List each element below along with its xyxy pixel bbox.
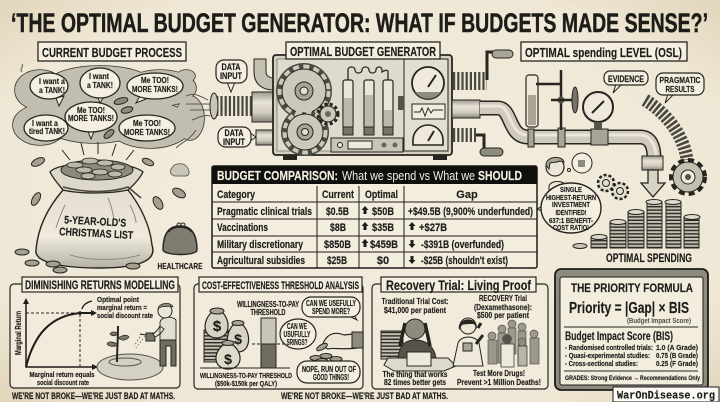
caption: the thing that works: The thing that works xyxy=(382,370,448,379)
speech bubble: I want a TANK 2 xyxy=(80,68,120,103)
callout: single highest-return investment xyxy=(537,183,601,233)
speech bubble: data input bottom: DATA xyxy=(224,128,244,138)
machine body xyxy=(273,55,452,160)
speech bubble: me too 2: Me TOO! xyxy=(77,106,105,115)
line chart: marginal return curve: Marginal Return xyxy=(13,311,23,355)
speech bubble: tired tank: tired TANK! xyxy=(29,127,65,136)
callout: single highest-return investment: IDENTIFIED! xyxy=(556,208,586,217)
threshold bar: THRESHOLD xyxy=(250,308,286,317)
recovery trial cost text: RECOVERY Trial xyxy=(479,294,527,303)
caption: test more drugs: Test More Drugs! xyxy=(473,369,525,378)
heading: optimal budget generator xyxy=(286,42,440,59)
small gears xyxy=(598,175,628,199)
test tube and stand xyxy=(526,70,577,130)
input pipes xyxy=(252,59,274,145)
speech bubble: can we usefully shrink: USUFULLY xyxy=(284,330,311,339)
main output pipe xyxy=(480,106,663,170)
callout: single highest-return investment: COST RATIO! xyxy=(553,223,589,232)
money bags xyxy=(204,308,249,369)
speech bubble: can we usefully shrink: SRINGS? xyxy=(286,338,308,347)
heading: diminishing returns: DIMINISHING RETURNS MODELLING xyxy=(25,280,175,292)
curved spring and gear xyxy=(645,100,705,194)
row: military discretionary: $850B xyxy=(324,239,351,251)
speech bubble: can we usefully spend more: SPEND MORE? xyxy=(312,307,350,316)
threshold bar: ($50k-$150k per QALY) xyxy=(215,379,277,388)
table frame xyxy=(212,166,537,268)
list: evidence grades xyxy=(565,343,698,368)
speech bubble: pragmatic results: PRAGMATIC xyxy=(660,75,700,85)
heading: budget impact score: Budget Impact Score (BIS) xyxy=(565,331,673,343)
table header: BUDGET COMPARISON: xyxy=(217,169,338,183)
heading: cost-effectiveness xyxy=(199,277,362,292)
money sack: 5-year-old's christmas list: CHRISTMAS LIST xyxy=(59,226,134,242)
speech bubble: data input top xyxy=(216,60,247,92)
column headers: Optimal xyxy=(365,189,398,201)
analyst figure and thought bubble xyxy=(546,153,592,192)
caption: test more drugs xyxy=(457,369,541,387)
formula caption: (Budget Impact Score) xyxy=(627,318,691,325)
speech bubble: data input bottom: INPUT xyxy=(223,137,245,147)
traditional trial cost text: $41,000 per patient xyxy=(384,306,446,315)
row: pragmatic clinical trials: $50B xyxy=(372,206,394,218)
panel frame xyxy=(194,284,363,389)
panel: cost-effectiveness threshold analysis xyxy=(194,277,363,389)
column headers xyxy=(217,189,478,201)
panel: diminishing returns modelling xyxy=(10,277,180,388)
panel: current budget process xyxy=(13,42,210,273)
speech bubble: data input bottom xyxy=(218,127,256,147)
recovery trial cost text xyxy=(474,294,532,320)
outer plaque xyxy=(555,269,708,390)
speech bubble: data input top: DATA xyxy=(222,62,241,72)
threshold bar: WILLINGNESS-TO-PAY xyxy=(237,300,299,309)
speech bubble: I want a TANK: a TANK! xyxy=(39,86,65,95)
caption: test more drugs: Prevent >1 Million Deaths! xyxy=(457,378,541,387)
speech bubble: evidence xyxy=(604,71,648,93)
money bags: $ xyxy=(224,351,232,367)
gauges and monitor xyxy=(412,67,445,145)
speech bubble: I want a TANK: I want a xyxy=(39,77,65,86)
control console xyxy=(331,138,403,152)
row: vaccinations: $8B xyxy=(330,222,346,234)
row: vaccinations: +$27B xyxy=(419,222,447,234)
money bags: $ xyxy=(234,331,242,347)
row: vaccinations xyxy=(217,222,447,234)
speech bubble: pragmatic results xyxy=(656,73,704,103)
row: agricultural subsidies: Agricultural subsidies xyxy=(217,255,305,267)
column headers: Current xyxy=(322,189,354,201)
heading: current budget process xyxy=(38,42,186,61)
list: evidence grades: 0.75 (B Grade) xyxy=(656,351,698,360)
output springs and crank xyxy=(452,50,513,156)
list: evidence grades: - Randomised controlled trials: xyxy=(565,343,653,352)
speech bubble: I want a TANK 2: I want xyxy=(89,72,109,81)
callout: single highest-return investment: INVESTMENT xyxy=(552,200,590,209)
speech bubble: nope: GOOD THINGS! xyxy=(313,373,349,382)
speech bubble: me too 3: MORE TANKS! xyxy=(124,128,170,137)
speech bubble: pragmatic results: RESULTS xyxy=(666,84,695,94)
panel: budget comparison table xyxy=(212,166,537,268)
speech bubble: me too 1: Me TOO! xyxy=(141,76,169,85)
row: pragmatic clinical trials: $0.5B xyxy=(326,206,349,218)
pressure gauge xyxy=(572,87,613,130)
row: military discretionary: $459B xyxy=(370,239,398,251)
scattered coins xyxy=(15,156,165,273)
healthcare coin purse xyxy=(158,164,203,271)
line chart: marginal return curve xyxy=(13,295,153,387)
table header: SHOULD xyxy=(478,169,522,183)
input spring xyxy=(210,93,252,119)
table header: What we spend vs What we xyxy=(342,169,475,183)
traditional trial cost text xyxy=(382,297,448,315)
speech bubble: me too 2 xyxy=(65,102,117,139)
panel: optimal budget generator xyxy=(210,42,513,160)
panel frame xyxy=(372,284,548,389)
illustration: crowd of patients xyxy=(488,320,539,367)
row: agricultural subsidies xyxy=(217,255,508,267)
recovery trial cost text: $500 per patient xyxy=(477,311,529,320)
down arrow xyxy=(641,170,665,197)
speech bubble: can we usefully shrink: CAN WE xyxy=(287,322,307,331)
coin stacks chart xyxy=(573,200,700,248)
illustration: stressed researcher xyxy=(381,319,456,371)
row: agricultural subsidies: $0 xyxy=(377,255,389,267)
caption: the thing that works: 82 times better gets xyxy=(384,378,446,387)
panel: recovery trial xyxy=(372,277,548,389)
speech bubble: can we usefully spend more: CAN WE USEFULLY xyxy=(306,299,356,308)
traditional trial cost text: Traditional Trial Cost: xyxy=(382,297,448,306)
panel: optimal spending level xyxy=(480,42,705,265)
speech bubble: tired tank: I want a xyxy=(32,119,58,128)
inner plaque xyxy=(560,277,703,385)
speech bubble: me too 3: Me TOO! xyxy=(133,119,161,128)
speech bubble: me too 1 xyxy=(127,73,183,103)
row: pragmatic clinical trials: Pragmatic clinical trials xyxy=(217,206,312,218)
heading: optimal budget generator: OPTIMAL BUDGET GENERATOR xyxy=(290,45,436,59)
illustration: gardener watering plant xyxy=(97,303,176,380)
line chart: marginal return curve: Marginal return equals xyxy=(30,370,94,379)
speech bubble: nope: NOPE, RUN OUT OF xyxy=(302,365,356,374)
speech bubble: I want a TANK 2: a TANK! xyxy=(87,81,113,90)
row: agricultural subsidies: -$25B (shouldn't exist) xyxy=(421,255,508,267)
row: vaccinations: Vaccinations xyxy=(217,222,268,234)
grey cloud of demands xyxy=(13,64,210,148)
speech bubble: nope xyxy=(297,361,360,383)
panel frame xyxy=(10,284,180,388)
money bags: $ xyxy=(213,318,222,335)
speech bubble: me too 1: MORE TANKS! xyxy=(132,85,178,94)
heading: priority formula: THE PRIORITY FORMULA xyxy=(571,281,693,295)
row: military discretionary: -$391B (overfunded) xyxy=(421,239,504,251)
list: evidence grades: 0.25 (F Grade) xyxy=(656,359,698,368)
callout: single highest-return investment: HIGHEST-RETURN xyxy=(546,193,596,202)
line chart: marginal return curve: social discount rate xyxy=(97,311,153,320)
speech bubble: me too 2: MORE TANKS! xyxy=(68,114,114,123)
list: evidence grades: 1.0 (A Grade) xyxy=(656,343,698,352)
column headers: Category xyxy=(217,189,256,201)
speech bubble: me too 3 xyxy=(119,115,175,141)
illustration: doctor xyxy=(453,318,483,366)
hand with coins xyxy=(310,332,363,364)
speech bubble: tired tank xyxy=(24,115,68,141)
list: evidence grades: - Quasi-experimental studies: xyxy=(565,351,650,360)
heading: diminishing returns xyxy=(22,277,178,292)
list: evidence grades: - Cross-sectional studies: xyxy=(565,359,638,368)
callout: single highest-return investment: SINGLE xyxy=(560,185,582,194)
line chart: marginal return curve: marginal return = xyxy=(97,303,147,312)
line chart: marginal return curve: Optimal point xyxy=(97,295,139,304)
row: vaccinations: $35B xyxy=(372,222,394,234)
speech bubble: I want a TANK xyxy=(30,73,68,106)
row: military discretionary: Military discretionary xyxy=(217,239,304,251)
heading: cost-effectiveness: COST-EFFECTIVENESS THRESHOLD ANALYSIS xyxy=(202,280,359,292)
row: military discretionary xyxy=(217,239,504,251)
speech bubble: can we usefully shrink xyxy=(280,319,316,349)
speech bubble: can we usefully spend more xyxy=(302,297,360,320)
row: pragmatic clinical trials xyxy=(217,206,533,218)
heading: current budget process: CURRENT BUDGET PROCESS xyxy=(42,45,182,60)
healthcare coin purse: HEALTHCARE xyxy=(158,261,203,271)
gears xyxy=(276,63,338,156)
money sack: 5-year-old's christmas list: 5-YEAR-OLD'S xyxy=(64,214,126,230)
recovery trial cost text: (Dexamethasone): xyxy=(474,303,532,312)
heading: OSL xyxy=(521,42,687,61)
threshold bar: WILLINGNESS-TO-PAY THRESHOLD xyxy=(200,371,292,380)
threshold bar xyxy=(200,300,299,388)
heading: recovery trial: Recovery Trial: Living Proof xyxy=(386,278,531,293)
table header xyxy=(212,166,537,184)
callout: single highest-return investment: 637:1 BENEFIT- xyxy=(549,216,593,225)
row: agricultural subsidies: $25B xyxy=(327,255,347,267)
footer note centre: WE'RE NOT BROKE—WE'RE JUST BAD AT MATHS. xyxy=(281,391,448,402)
glass tubes xyxy=(343,67,404,135)
column headers: Gap xyxy=(456,189,478,201)
money sack: 5-year-old's christmas list xyxy=(36,142,153,268)
row: pragmatic clinical trials: +$49.5B (9,900% underfunded) xyxy=(408,206,533,218)
caption: the thing that works xyxy=(382,370,448,387)
speech bubble: evidence: EVIDENCE xyxy=(608,74,644,85)
speech bubble: data input top: INPUT xyxy=(220,71,242,81)
panel: the priority formula xyxy=(555,269,708,390)
footer note left: WE'RE NOT BROKE—WE'RE JUST BAD AT MATHS. xyxy=(12,391,175,402)
line chart: marginal return curve: social discount rate xyxy=(37,378,89,387)
